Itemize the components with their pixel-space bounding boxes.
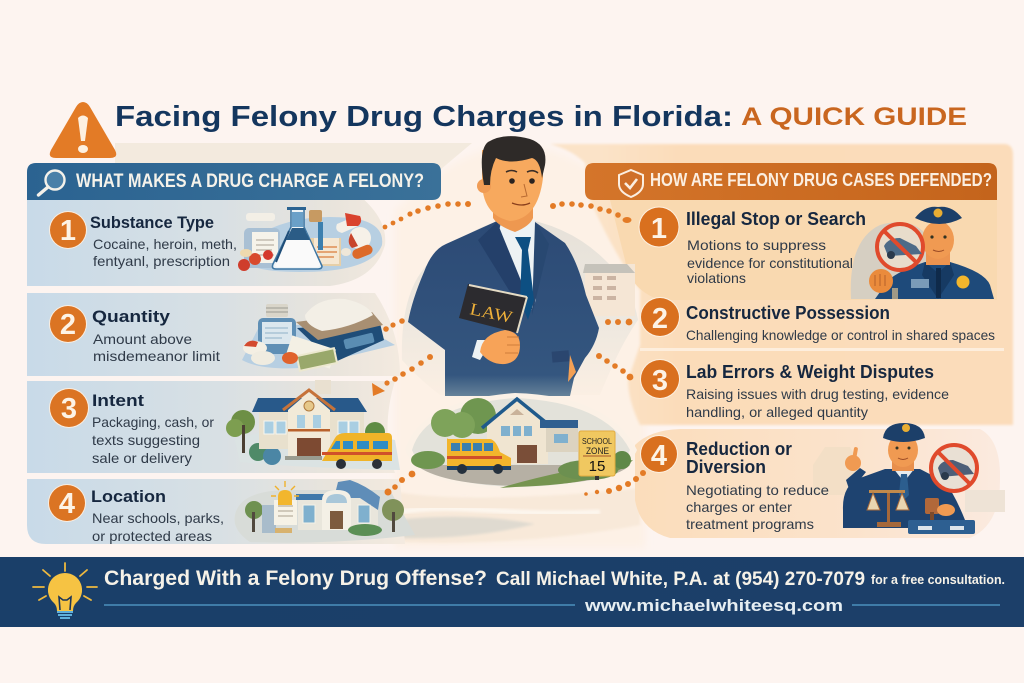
header bar bbox=[585, 163, 997, 200]
item 2: constructive possession: Constructive Possession bbox=[686, 303, 890, 323]
dotted arrows bbox=[372, 201, 646, 496]
item 1: illegal stop: 1 bbox=[651, 213, 667, 245]
illustration: school zone scene: ZONE bbox=[586, 446, 609, 456]
icon: light bulb bbox=[33, 563, 97, 618]
item 4: reduction or diversion: treatment programs bbox=[686, 516, 814, 532]
item 1: substance type: Substance Type bbox=[90, 213, 214, 232]
title: Facing Felony Drug Charges in Florida: bbox=[115, 101, 733, 133]
title: A QUICK GUIDE bbox=[741, 103, 967, 131]
item 4: reduction or diversion: Reduction or bbox=[686, 439, 792, 459]
item 4: location: or protected areas bbox=[92, 528, 212, 544]
item 3: intent: Packaging, cash, or bbox=[92, 414, 214, 430]
illustration: lawyer backdrop with faded building bbox=[402, 217, 638, 395]
icon: flask, bottle and pills bbox=[238, 207, 382, 272]
icon: scale, powder, jar and money bbox=[242, 299, 395, 371]
item 3: intent: texts suggesting bbox=[92, 432, 200, 448]
item 2: constructive possession: 2 bbox=[652, 303, 668, 335]
item 4: location: 4 bbox=[59, 488, 75, 520]
item 4: reduction or diversion: charges or enter bbox=[686, 499, 792, 515]
panel rows background bbox=[27, 196, 405, 544]
panel: how are felony drug cases defended bbox=[585, 163, 1005, 538]
item 1: illegal stop: Motions to suppress bbox=[687, 237, 826, 253]
item 1: illegal stop: evidence for constitutional bbox=[687, 255, 853, 271]
item 3: lab errors: Lab Errors & Weight Disputes bbox=[686, 362, 934, 382]
icon: protected area building and sign bbox=[235, 480, 415, 543]
item 4: reduction or diversion bbox=[640, 435, 829, 532]
call to action text: Charged With a Felony Drug Offense? bbox=[104, 567, 487, 590]
item 3: lab errors bbox=[640, 359, 949, 420]
item 2: quantity: misdemeanor limit bbox=[93, 348, 220, 364]
icon: school with bus bbox=[226, 380, 400, 470]
icon: warning triangle bbox=[50, 102, 116, 158]
item 4: reduction or diversion: Diversion bbox=[686, 457, 766, 477]
item 1: illegal stop: Illegal Stop or Search bbox=[686, 209, 866, 229]
item 2: constructive possession bbox=[640, 297, 995, 343]
call to action text: Call Michael White, P.A. at (954) 270-7079 bbox=[496, 569, 865, 590]
header bar: WHAT MAKES A DRUG CHARGE A FELONY? bbox=[76, 171, 424, 192]
item 3: lab errors: Raising issues with drug testing, evidence bbox=[686, 386, 949, 402]
item 2: quantity bbox=[49, 305, 220, 364]
item 1: substance type: fentyanl, prescription bbox=[93, 253, 230, 269]
footer banner bbox=[0, 557, 1024, 627]
item 4: location: Location bbox=[91, 487, 166, 506]
call to action text: for a free consultation. bbox=[871, 572, 1005, 587]
item 2: constructive possession: Challenging knowledge or control in shared spaces bbox=[686, 327, 995, 343]
item 2: quantity: 2 bbox=[60, 309, 76, 341]
item 3: intent: sale or delivery bbox=[92, 450, 192, 466]
item 1: illegal stop bbox=[638, 206, 866, 286]
illustration: school zone scene bbox=[405, 393, 637, 490]
item 2: quantity: Quantity bbox=[92, 307, 171, 326]
header bar bbox=[27, 163, 441, 200]
illustration: school zone scene: SCHOOL bbox=[582, 436, 612, 446]
item 2: quantity: Amount above bbox=[93, 331, 192, 347]
icon: police officer with no-car sign bbox=[851, 207, 994, 299]
item 4: reduction or diversion: Negotiating to reduce bbox=[686, 482, 829, 498]
item 1: substance type bbox=[49, 211, 237, 269]
icon: attorney with scales and no-car sign bbox=[843, 423, 1005, 534]
panel rows background bbox=[610, 200, 1000, 538]
item 3: lab errors: handling, or alleged quantity bbox=[686, 404, 868, 420]
faded building behind row 4 bbox=[813, 447, 860, 495]
illustration: lawyer holding law book bbox=[408, 136, 599, 396]
panel: what makes a drug charge a felony bbox=[27, 163, 441, 544]
item 1: substance type: Cocaine, heroin, meth, bbox=[93, 236, 237, 252]
item 3: intent bbox=[49, 388, 214, 466]
item 3: lab errors: 3 bbox=[652, 365, 668, 397]
website: www.michaelwhiteesq.com bbox=[584, 596, 843, 615]
call to action text bbox=[104, 567, 1005, 590]
item 1: substance type: 1 bbox=[60, 215, 76, 247]
item 3: intent: 3 bbox=[61, 393, 77, 425]
item 3: intent: Intent bbox=[92, 391, 144, 410]
background washes bbox=[115, 143, 1013, 548]
item 4: location: Near schools, parks, bbox=[92, 510, 224, 526]
illustration: lawyer holding law book: LAW bbox=[468, 299, 515, 327]
item 4: reduction or diversion: 4 bbox=[651, 440, 667, 472]
item 4: location bbox=[48, 484, 224, 544]
title bbox=[115, 101, 967, 133]
item 1: illegal stop: violations bbox=[687, 270, 746, 286]
illustration: school zone scene: 15 bbox=[589, 458, 605, 475]
